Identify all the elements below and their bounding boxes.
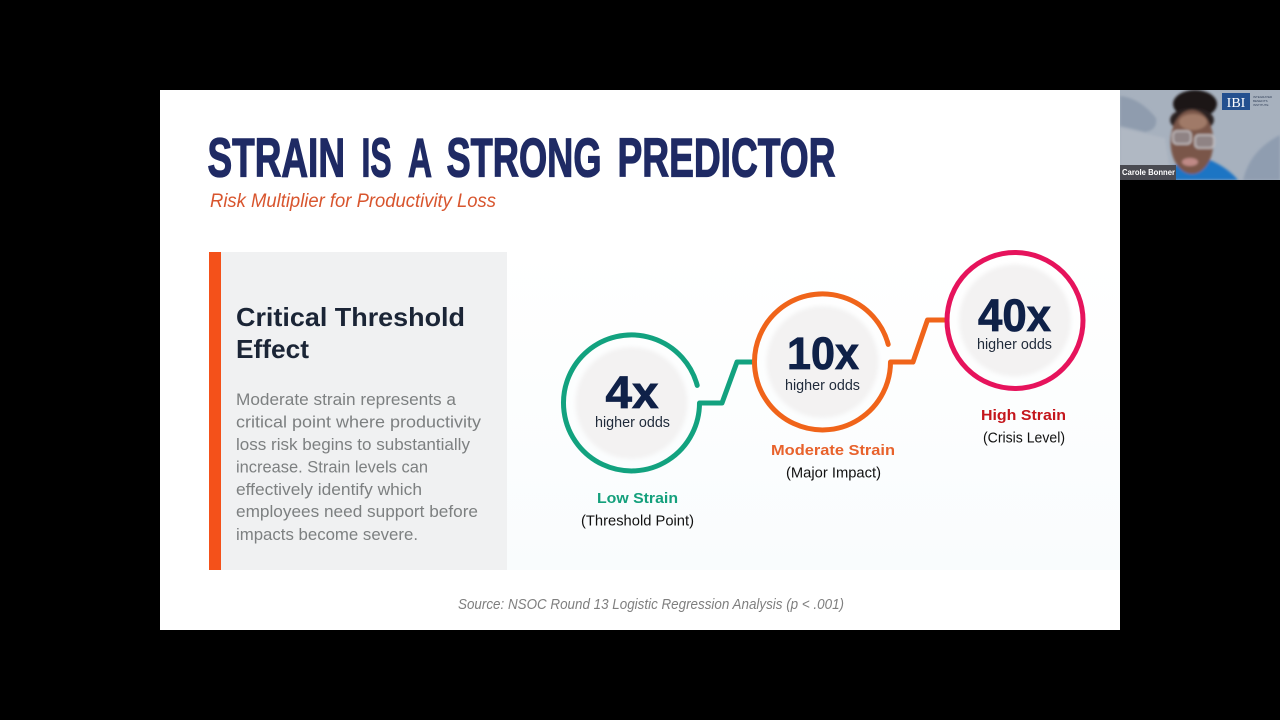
IBI logo: IBI: [1227, 96, 1246, 111]
IBI logo: INSTITUTE: [1253, 103, 1268, 107]
sublabel: (Major Impact): [786, 464, 881, 482]
inner disc: [959, 264, 1071, 376]
caption: higher odds: [595, 414, 670, 431]
label: Low Strain: [597, 490, 678, 507]
source note: Source: NSOC Round 13 Logistic Regression Analysis (p < .001): [458, 597, 844, 613]
IBI logo: INTEGRATED: [1253, 95, 1273, 99]
title: STRAIN: [208, 126, 345, 188]
IBI logo: BENEFITS: [1253, 99, 1268, 103]
label: High Strain: [981, 407, 1066, 424]
panel body text: increase. Strain levels can: [236, 458, 428, 476]
title: PREDICTOR: [618, 126, 836, 188]
panel background: [221, 252, 507, 570]
sublabel: (Threshold Point): [581, 512, 694, 530]
label: Moderate Strain: [771, 442, 895, 459]
IBI logo: [1222, 93, 1273, 111]
panel body text: employees need support before: [236, 502, 478, 521]
sublabel: (Crisis Level): [983, 430, 1065, 446]
person: face: [1170, 110, 1214, 174]
green ring with connector: [564, 335, 753, 471]
panel body text: Moderate strain represents a: [236, 390, 457, 409]
chart background panel: [507, 250, 1120, 570]
title: IS: [362, 126, 392, 188]
caption: higher odds: [785, 377, 860, 394]
panel heading: Effect: [236, 334, 309, 364]
presenter name tag: [1120, 165, 1176, 180]
panel body text: impacts become severe.: [236, 525, 418, 544]
person: shirt: [1172, 159, 1239, 180]
caption: higher odds: [977, 336, 1052, 353]
slide background: [160, 90, 1120, 630]
panel accent bar: [209, 252, 221, 570]
title: A: [408, 126, 432, 188]
value: 4x: [606, 367, 658, 418]
value: 40x: [978, 290, 1051, 341]
panel: critical threshold effect: [209, 252, 507, 570]
presenter name tag: Carole Bonner: [1122, 168, 1175, 177]
orange ring with connector: [754, 294, 945, 430]
webcam background: [1120, 90, 1280, 180]
inner disc: [576, 347, 688, 459]
person: hair: [1173, 90, 1217, 118]
panel body text: loss risk begins to substantially: [236, 435, 470, 454]
subtitle: Risk Multiplier for Productivity Loss: [210, 191, 496, 212]
panel body text: [236, 390, 482, 544]
title: STRONG: [446, 126, 602, 188]
step: low strain: [564, 335, 753, 530]
panel heading: [236, 302, 465, 364]
step: high strain: [947, 252, 1083, 446]
inner disc: [766, 306, 878, 418]
background shapes and presenter: [1120, 90, 1280, 180]
pink ring: [947, 252, 1083, 388]
panel heading: Critical Threshold: [236, 302, 465, 332]
person: forehead highlight: [1179, 114, 1207, 130]
person: glasses: [1173, 131, 1214, 148]
value: 10x: [787, 328, 859, 379]
panel body text: critical point where productivity: [236, 412, 482, 432]
webcam panel: [1120, 90, 1280, 180]
step: moderate strain: [754, 294, 945, 482]
person: mouth: [1182, 158, 1198, 166]
title: [208, 126, 836, 188]
panel body text: effectively identify which: [236, 480, 422, 499]
